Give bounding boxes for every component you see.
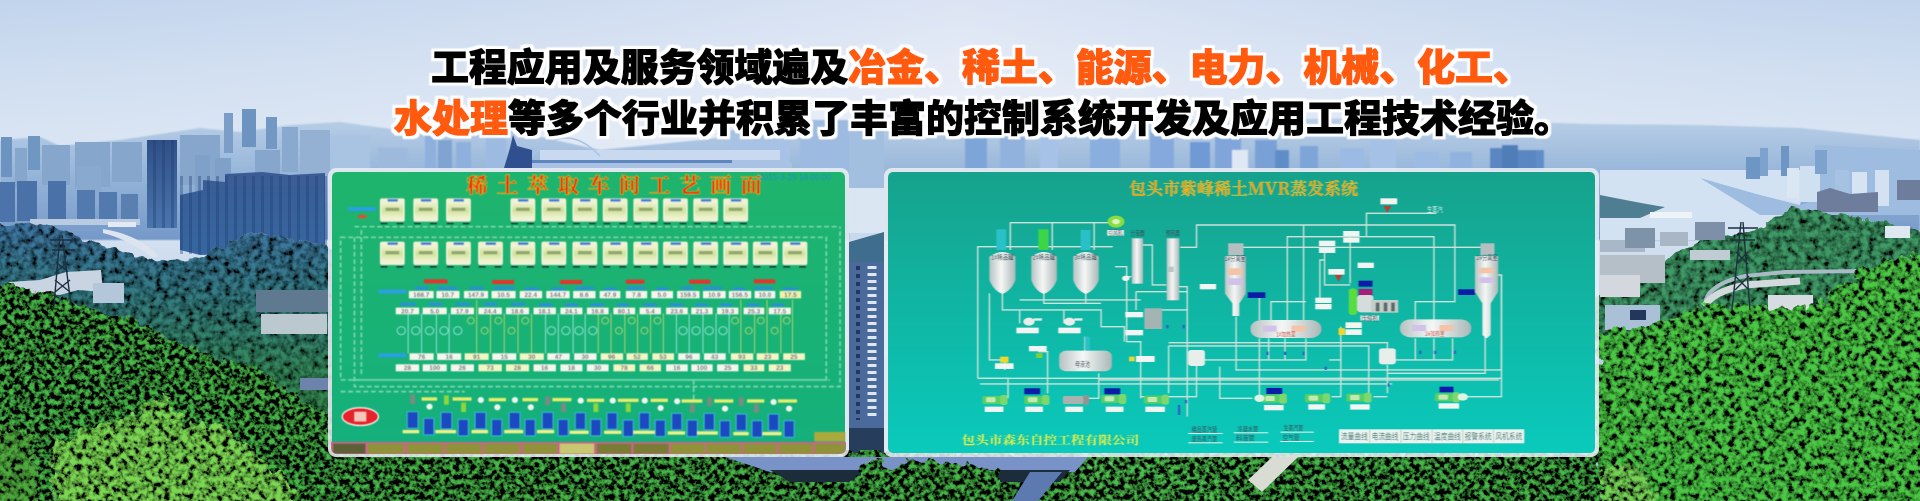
data row 1: 47.9 <box>604 292 617 299</box>
crystal tank <box>1059 337 1112 371</box>
legend: 料液管 <box>1236 434 1255 442</box>
crystal tank: 母液池 <box>1075 360 1090 368</box>
legend: 稀品蒸汽管 <box>1192 425 1217 434</box>
background: foreground bright foliage <box>0 395 1660 501</box>
heading line 2: 水处理等多个行业并积累了丰富的控制系统开发及应用工程技术经验。 <box>394 98 1572 141</box>
data row 4: 28 <box>404 365 412 372</box>
data row 2: 5.0 <box>430 308 440 315</box>
reactor tanks: 3#稀品罐 <box>1075 253 1097 261</box>
data row 4: 30 <box>594 365 602 372</box>
pipe value tags <box>985 198 1459 412</box>
data row 3: 16 <box>446 354 453 361</box>
data row 3: 23 <box>764 354 772 361</box>
right evaporator: 2#分离室 <box>1477 253 1497 262</box>
data row 1: 8.6 <box>580 292 589 299</box>
feed pumps <box>982 392 1468 405</box>
heat exchangers <box>1251 319 1471 338</box>
data row 4: 100 <box>429 365 441 372</box>
background: left forest hillside <box>0 280 340 501</box>
system navigation buttons <box>1339 429 1524 443</box>
background: highway overpass <box>1705 271 1865 306</box>
status labels <box>348 207 406 357</box>
data row 2: 17.5 <box>773 308 787 315</box>
system navigation buttons: 流量曲线 <box>1341 431 1368 442</box>
reactor tanks: 2#稀品罐 <box>1033 253 1055 261</box>
legend: 空气管 <box>1283 433 1299 442</box>
compressor: 压缩机 <box>1361 314 1378 322</box>
data row 2: 80.1 <box>618 308 631 315</box>
data row 3: 43 <box>711 354 719 361</box>
legend: 冷凝水管 <box>1237 425 1258 433</box>
background: distant hazy skyline <box>0 118 1920 240</box>
left evaporator <box>1225 243 1246 316</box>
heat exchangers: 1#加热室 <box>1276 331 1296 338</box>
data row 3: 25 <box>790 354 798 361</box>
data row 4: 100 <box>696 365 708 372</box>
data row 4 <box>396 364 791 372</box>
data row 1: 159.5 <box>680 292 697 299</box>
condenser columns: 预热器 <box>1166 229 1180 237</box>
pump indicators <box>403 395 797 435</box>
data row 2: 19.3 <box>721 308 735 315</box>
data row 3: 52 <box>634 354 641 361</box>
legend: 废热蒸汽管 <box>1192 435 1217 443</box>
data row 2: 18.6 <box>511 308 524 315</box>
data row 2: 16.8 <box>591 308 604 315</box>
system navigation buttons: 压力曲线 <box>1403 431 1430 442</box>
data row 3: 30 <box>582 354 589 361</box>
company name: 包头市森东自控工程有限公司 <box>961 431 1139 447</box>
data row 4: 66 <box>647 365 654 372</box>
data row 3: 76 <box>418 354 426 361</box>
data row 1: 10.5 <box>497 292 510 299</box>
system navigation buttons: 报警系统 <box>1465 431 1492 442</box>
legend: 生蒸汽管 <box>1284 424 1303 432</box>
data row 2: 24.4 <box>484 308 497 315</box>
left evaporator: 1#分离室 <box>1225 254 1246 263</box>
data row 1 <box>409 291 801 299</box>
data row 1: 22.4 <box>524 292 538 299</box>
data row 2: 17.9 <box>456 308 469 315</box>
data row 4: 26 <box>459 365 466 372</box>
data row 3: 96 <box>608 354 616 361</box>
process pipes <box>978 213 1501 417</box>
data row 1: 5.0 <box>657 292 667 299</box>
heading <box>394 47 1572 141</box>
red group labels <box>424 279 775 284</box>
flow lines and valves <box>397 300 793 353</box>
data row 2: 20.7 <box>401 308 414 315</box>
data row 4: 16 <box>673 365 681 372</box>
data row 3: 93 <box>738 354 746 361</box>
system navigation buttons: 风机系统 <box>1495 431 1523 442</box>
heading line 1: 工程应用及服务领域遍及冶金、稀土、能源、电力、机械、化工、 <box>431 47 1531 90</box>
small transfer pumps <box>1023 308 1396 366</box>
panel title: 包头市紫峰稀土MVR蒸发系统 <box>1129 176 1360 200</box>
background: white houses and towns <box>8 222 1910 390</box>
data row 3: 15 <box>501 354 508 361</box>
legend <box>1188 424 1314 443</box>
data row 4: 33 <box>750 365 758 372</box>
steam label: 生蒸汽 <box>1427 205 1443 214</box>
valves <box>1000 206 1391 363</box>
data row 1: 17.5 <box>784 292 797 299</box>
data row 3: 47 <box>555 354 562 361</box>
data row 1: 10.9 <box>708 292 721 299</box>
background: right forest hillside <box>1596 250 1920 501</box>
bottom navigation buttons <box>330 432 847 455</box>
company logo <box>342 408 379 426</box>
fan: 引风机 <box>1109 228 1123 237</box>
dashed piping frame <box>341 227 840 400</box>
condenser columns: 分液器 <box>1130 229 1144 237</box>
data row 1: 144.7 <box>550 292 567 299</box>
second row storage tanks <box>380 242 807 268</box>
condenser columns <box>1122 229 1180 300</box>
data row 1: 10.0 <box>759 292 772 299</box>
right evaporator <box>1475 243 1498 338</box>
heat exchangers: 2#加热室 <box>1425 330 1445 338</box>
data row 4: 16 <box>541 365 549 372</box>
background: city and river right <box>1600 145 1920 240</box>
background: bridge behind the heading <box>504 135 792 169</box>
data row 2 <box>396 308 791 315</box>
system navigation buttons: 温度曲线 <box>1434 431 1461 442</box>
top row storage tanks <box>380 198 748 224</box>
data row 4: 28 <box>514 365 521 372</box>
fan <box>1107 216 1124 237</box>
data row 1: 168.7 <box>413 292 430 299</box>
data row 2: 21.3 <box>696 308 709 315</box>
data row 3: 30 <box>528 354 536 361</box>
system navigation buttons: 电流曲线 <box>1372 431 1399 442</box>
data row 2: 5.4 <box>646 308 655 315</box>
data row 4: 73 <box>486 365 494 372</box>
data row 4: 23 <box>776 365 784 372</box>
data row 3: 53 <box>659 354 667 361</box>
pump tanks row lower <box>424 418 794 437</box>
data row 3: 96 <box>685 354 693 361</box>
pump tanks row upper <box>407 412 779 431</box>
blue setpoint tags <box>1024 289 1475 394</box>
background: electricity pylons <box>50 222 1758 310</box>
compressor <box>1349 281 1398 322</box>
background: mid ground hills with town <box>0 208 1920 440</box>
background: centre gap skyline and building <box>849 128 884 457</box>
reactor tanks <box>989 229 1099 294</box>
data row 1: 156.5 <box>732 292 748 299</box>
data row 2: 23.6 <box>670 308 684 315</box>
data row 2: 18.1 <box>538 308 551 315</box>
background: city towers left <box>0 109 330 258</box>
data row 4: 78 <box>620 365 628 372</box>
data row 1: 147.9 <box>468 292 485 299</box>
reactor tanks: 1#稀品罐 <box>991 253 1014 261</box>
blue flow arrows <box>1166 325 1456 415</box>
data row 1: 7.8 <box>632 292 641 299</box>
data row 2: 24.1 <box>565 308 578 315</box>
data row 1: 10.7 <box>441 292 455 299</box>
timestamp: 2015-3-25 16:00:00 <box>759 173 832 182</box>
panel title: 稀土萃取车间工艺画面 <box>466 170 762 200</box>
blue column labels <box>400 287 797 306</box>
data row 4: 18 <box>568 365 575 372</box>
background: bottom bridge and tree line <box>320 452 1600 501</box>
panel: MVR evaporation system screen <box>884 168 1599 457</box>
data row 4: 25 <box>724 365 732 372</box>
panel: rare earth extraction workshop screen <box>328 168 849 457</box>
data row 3 <box>410 353 805 361</box>
data row 3: 91 <box>473 354 481 361</box>
data row 2: 25.3 <box>748 308 761 315</box>
